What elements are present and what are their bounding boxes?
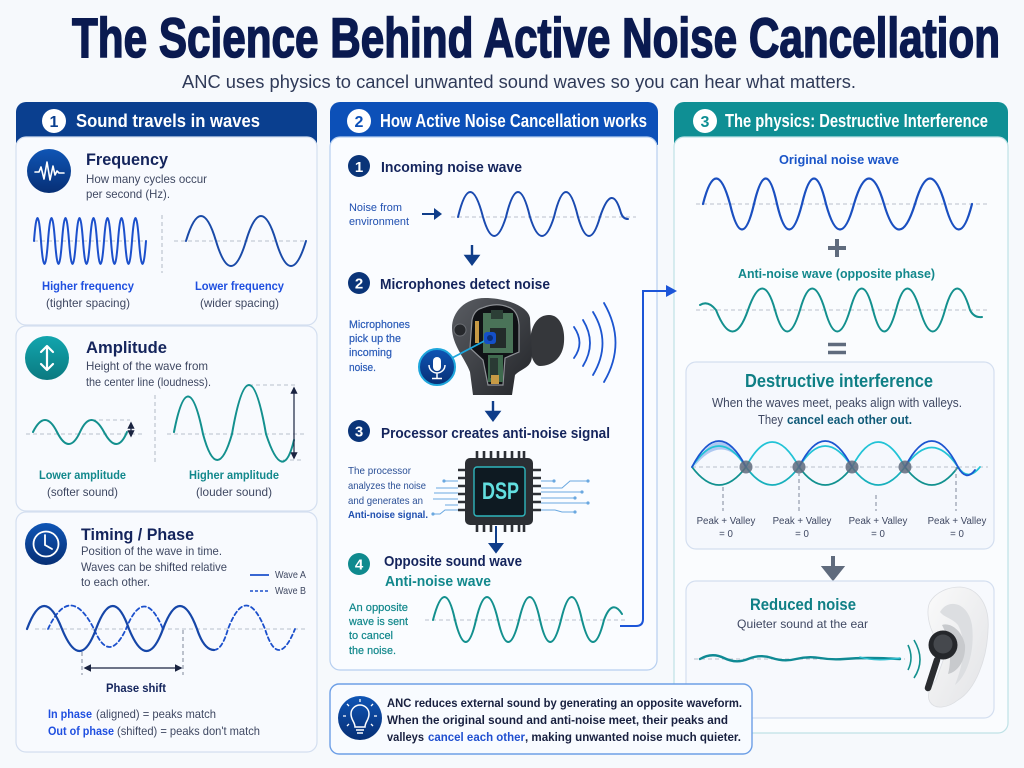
amplitude labels: (softer sound): [47, 485, 118, 499]
phase definitions: In phase: [48, 707, 92, 721]
card: destructive interference: Destructive interference: [745, 371, 933, 391]
callout text: , making unwanted noise much quieter.: [525, 730, 741, 744]
step 1: [348, 155, 636, 236]
icon: frequency pulse: [27, 149, 71, 193]
peak plus valley labels: = 0: [719, 529, 733, 540]
timing text: to each other.: [81, 575, 150, 589]
step 4: 4: [355, 556, 364, 574]
panel 2 header: 2: [355, 114, 364, 131]
step 4: Anti-noise wave: [385, 573, 491, 590]
amplitude labels: Higher amplitude: [189, 468, 279, 482]
icon: up-down arrow: [25, 336, 69, 380]
peak plus valley labels: = 0: [950, 529, 964, 540]
callout: [330, 684, 752, 754]
icon: ear with earbud: [928, 587, 988, 707]
original noise wave: Original noise wave: [779, 152, 899, 167]
panel: how ANC works: [330, 102, 658, 670]
panel 1 header: [16, 102, 317, 145]
frequency text: How many cycles occur: [86, 172, 207, 186]
peak plus valley labels: Peak + Valley: [849, 516, 908, 527]
equals sign: [828, 344, 846, 352]
original noise wave: [696, 152, 988, 230]
callout text: When the original sound and anti-noise meet, their peaks and: [387, 713, 728, 727]
frequency text: Frequency: [86, 150, 169, 169]
anti-noise wave: Anti-noise wave (opposite phase): [738, 266, 935, 281]
arrow: step 3 to 4: [490, 526, 502, 552]
callout text: valleys: [387, 730, 424, 744]
card: amplitude: [16, 326, 317, 511]
timing text: Timing / Phase: [81, 525, 194, 544]
timing text: [81, 525, 227, 589]
step 4: An opposite: [349, 602, 408, 614]
timing text: Waves can be shifted relative: [81, 560, 227, 574]
frequency labels: Lower frequency: [195, 279, 284, 293]
higher amplitude wave: [167, 385, 305, 462]
amplitude labels: (louder sound): [196, 485, 272, 499]
peak plus valley labels: = 0: [795, 529, 809, 540]
frequency labels: Higher frequency: [42, 279, 134, 293]
frequency text: per second (Hz).: [86, 187, 170, 201]
card: reduced noise: Quieter sound at the ear: [737, 617, 868, 631]
step 1: 1: [355, 159, 363, 176]
step 1: Incoming noise wave: [381, 159, 522, 176]
legend: Wave B: [275, 586, 306, 597]
icon: DSP chip: DSP: [482, 478, 519, 505]
step 4: the noise.: [349, 645, 396, 657]
card: frequency: [16, 137, 317, 325]
step 3: The processor: [348, 465, 411, 477]
peak plus valley labels: Peak + Valley: [697, 516, 756, 527]
amplitude text: Amplitude: [86, 338, 167, 357]
step 4: to cancel: [349, 630, 393, 642]
phase chart: Phase shift: [106, 681, 166, 695]
frequency text: [86, 150, 207, 201]
arrow: anti-noise to physics: [620, 285, 677, 626]
frequency labels: (wider spacing): [200, 296, 279, 310]
peak plus valley labels: = 0: [871, 529, 885, 540]
step 2: pick up the: [349, 333, 401, 345]
icon: earbud with microphone: [419, 298, 616, 395]
peak plus valley labels: Peak + Valley: [928, 516, 987, 527]
panel 2 header: How Active Noise Cancellation works: [380, 111, 647, 131]
step 2: incoming: [349, 347, 392, 359]
anti-noise wave: [696, 266, 988, 332]
panel 2 header: [330, 102, 658, 145]
higher frequency wave: [34, 218, 146, 264]
lower frequency wave: [174, 216, 306, 266]
phase chart: [27, 606, 305, 695]
card: timing / phase: [16, 512, 317, 752]
icon: clock: [25, 523, 67, 565]
step 1: environment: [349, 216, 409, 228]
panel 3 body: [674, 137, 1008, 733]
panel 3 header: 3: [701, 114, 710, 131]
phase definitions: (aligned) = peaks match: [96, 707, 216, 721]
legend: Wave A: [275, 570, 306, 581]
interference chart: [692, 441, 988, 511]
amplitude text: [86, 338, 211, 389]
frequency labels: [42, 279, 284, 310]
reduced noise wave: [694, 640, 920, 678]
arrow: step 1 to 2: [466, 245, 478, 264]
phase definitions: Out of phase: [48, 724, 114, 738]
peak plus valley labels: Peak + Valley: [773, 516, 832, 527]
phase definitions: [48, 707, 260, 738]
phase definitions: (shifted) = peaks don't match: [117, 724, 260, 738]
callout text: [387, 696, 742, 744]
timing text: Position of the wave in time.: [81, 544, 222, 558]
icon: DSP chip: [431, 451, 590, 532]
card: destructive interference: [686, 362, 994, 549]
step 3: 3: [355, 424, 363, 440]
step 3: [348, 420, 610, 521]
frequency labels: (tighter spacing): [46, 296, 130, 310]
step 2: 2: [355, 276, 363, 292]
step 4: wave is sent: [348, 616, 408, 628]
card: destructive interference: When the waves meet, peaks align with valleys.: [712, 396, 962, 410]
step 1: Noise from: [349, 202, 402, 214]
subtitle: ANC uses physics to cancel unwanted sound waves so you can hear what matters.: [182, 72, 856, 92]
step 3: Processor creates anti-noise signal: [381, 425, 610, 442]
card: reduced noise: Reduced noise: [750, 595, 856, 614]
panel 2 body: [330, 137, 657, 670]
step 2: Microphones detect noise: [380, 276, 550, 293]
card: destructive interference: They: [758, 413, 784, 427]
step 3: analyzes the noise: [348, 480, 426, 492]
amplitude text: Height of the wave from: [86, 359, 208, 373]
amplitude labels: [39, 468, 279, 499]
lower amplitude wave: [26, 420, 143, 444]
panel 1 header: 1: [50, 114, 59, 131]
panel 3 header: [674, 102, 1008, 145]
step 2: Microphones: [349, 319, 410, 331]
panel: the physics: [674, 102, 1008, 733]
peak plus valley labels: [697, 516, 987, 540]
arrow: to reduced noise: [825, 556, 841, 578]
step 2: noise.: [349, 362, 376, 374]
panel: sound travels in waves: [16, 102, 317, 752]
arrow: step 2 to 3: [487, 401, 499, 420]
step 3: and generates an: [348, 495, 423, 507]
card: destructive interference: cancel each other out.: [787, 413, 912, 427]
step 3: Anti-noise signal.: [348, 509, 428, 521]
legend: [250, 570, 306, 597]
card: reduced noise: [686, 581, 994, 718]
callout text: cancel each other: [428, 730, 525, 744]
callout text: ANC reduces external sound by generating an opposite waveform.: [387, 696, 742, 710]
step 4: [348, 553, 628, 657]
amplitude text: the center line (loudness).: [86, 375, 211, 389]
step 2: [348, 272, 550, 374]
amplitude labels: Lower amplitude: [39, 468, 126, 482]
plus sign: [828, 239, 846, 257]
panel 1 header: Sound travels in waves: [76, 111, 260, 131]
step 4: Opposite sound wave: [384, 553, 522, 570]
icon: light bulb: [338, 696, 382, 740]
